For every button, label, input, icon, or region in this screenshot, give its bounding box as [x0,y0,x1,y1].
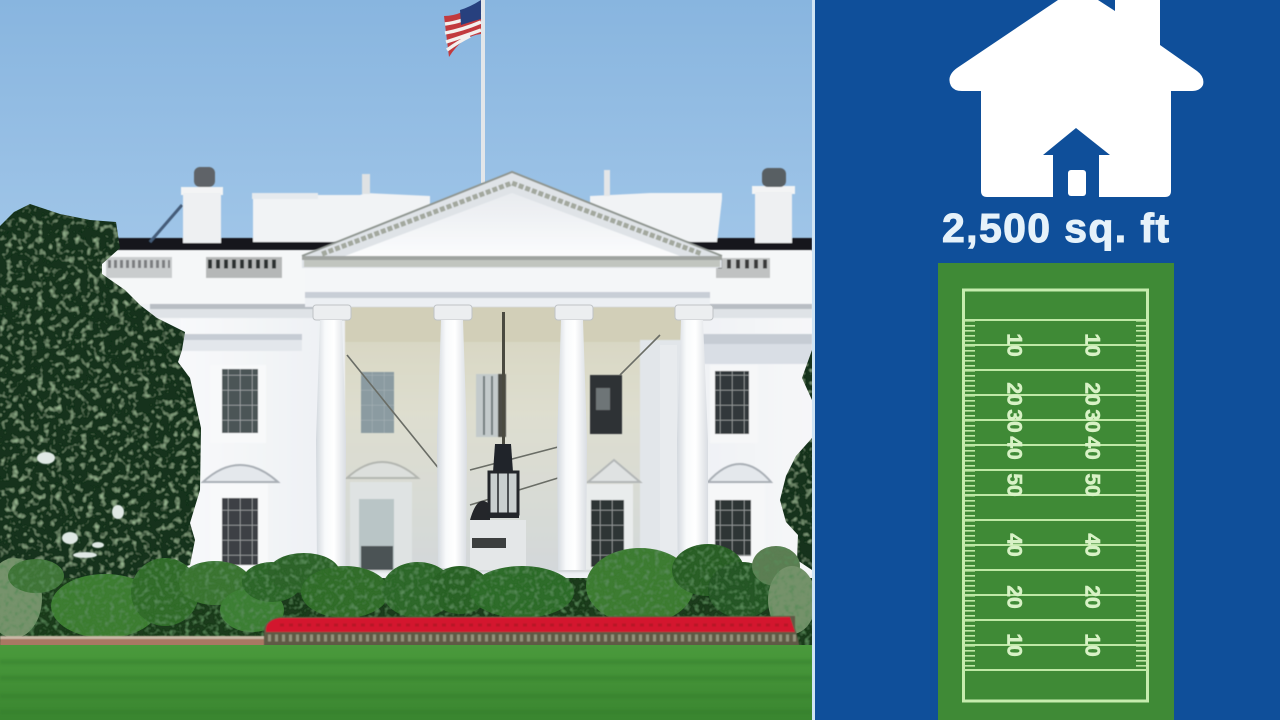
red flower bed [264,616,800,647]
field boundary [964,290,1148,701]
house area label: 2,500 sq. ft [942,205,1169,251]
yard numbers right: 40 [1080,436,1104,460]
yard numbers left: 10 [1002,633,1026,657]
yard lines [964,320,1147,670]
icon: house [949,0,1203,197]
yard numbers right: 20 [1080,585,1104,609]
window upper left [210,365,266,443]
tree sky gaps [37,452,124,558]
scene backdrop [100,250,812,630]
column 2 [434,305,472,568]
window portico centre [476,374,506,437]
lawn [0,645,812,720]
yard numbers left: 20 [1002,382,1026,406]
yard numbers left: 10 [1002,333,1026,357]
building: parapet with balustrades [100,250,812,304]
portico pediment and entablature [302,172,722,307]
tree left [0,204,201,585]
icon: house door window [1068,170,1086,196]
sideline hash marks [970,320,1141,670]
door portico left [347,462,418,572]
hedges [0,544,816,646]
building: portico interior [345,307,685,572]
yard numbers right: 50 [1080,473,1104,497]
window portico right [590,375,622,434]
yard numbers right: 10 [1080,333,1104,357]
window lower right [708,464,771,570]
walkway [0,636,268,647]
yard numbers right: 20 [1080,382,1104,406]
windows [203,365,771,572]
column 4 [675,305,713,568]
columns [313,305,713,570]
building: rear roof masses and chimneys [115,167,812,251]
yard numbers left [1002,333,1026,657]
column 5 partial [660,345,677,550]
yard numbers left: 40 [1002,533,1026,557]
yard numbers left: 50 [1002,473,1026,497]
panel: blue comparison panel [815,0,1280,720]
lantern and hanging wires [347,312,660,570]
tree right [780,350,812,570]
panel: football field [938,263,1174,720]
yard numbers right [1080,333,1104,657]
sky [0,0,812,300]
yard numbers left: 30 [1002,409,1026,433]
yard numbers left: 40 [1002,436,1026,460]
window lower left [203,465,278,570]
yard numbers right: 40 [1080,533,1104,557]
panel: White House photo scene [0,0,816,720]
field turf [938,263,1174,720]
column 3 [555,305,593,570]
yard numbers right: 10 [1080,633,1104,657]
window portico left [361,372,394,433]
flag and flagpole [444,0,485,183]
yard numbers right: 30 [1080,409,1104,433]
window lower centre right [585,460,640,570]
column 1 [313,305,351,568]
panel divider [812,0,815,720]
yard numbers left: 20 [1002,585,1026,609]
window upper right [710,365,758,443]
building: lower wall with frieze [150,304,812,574]
